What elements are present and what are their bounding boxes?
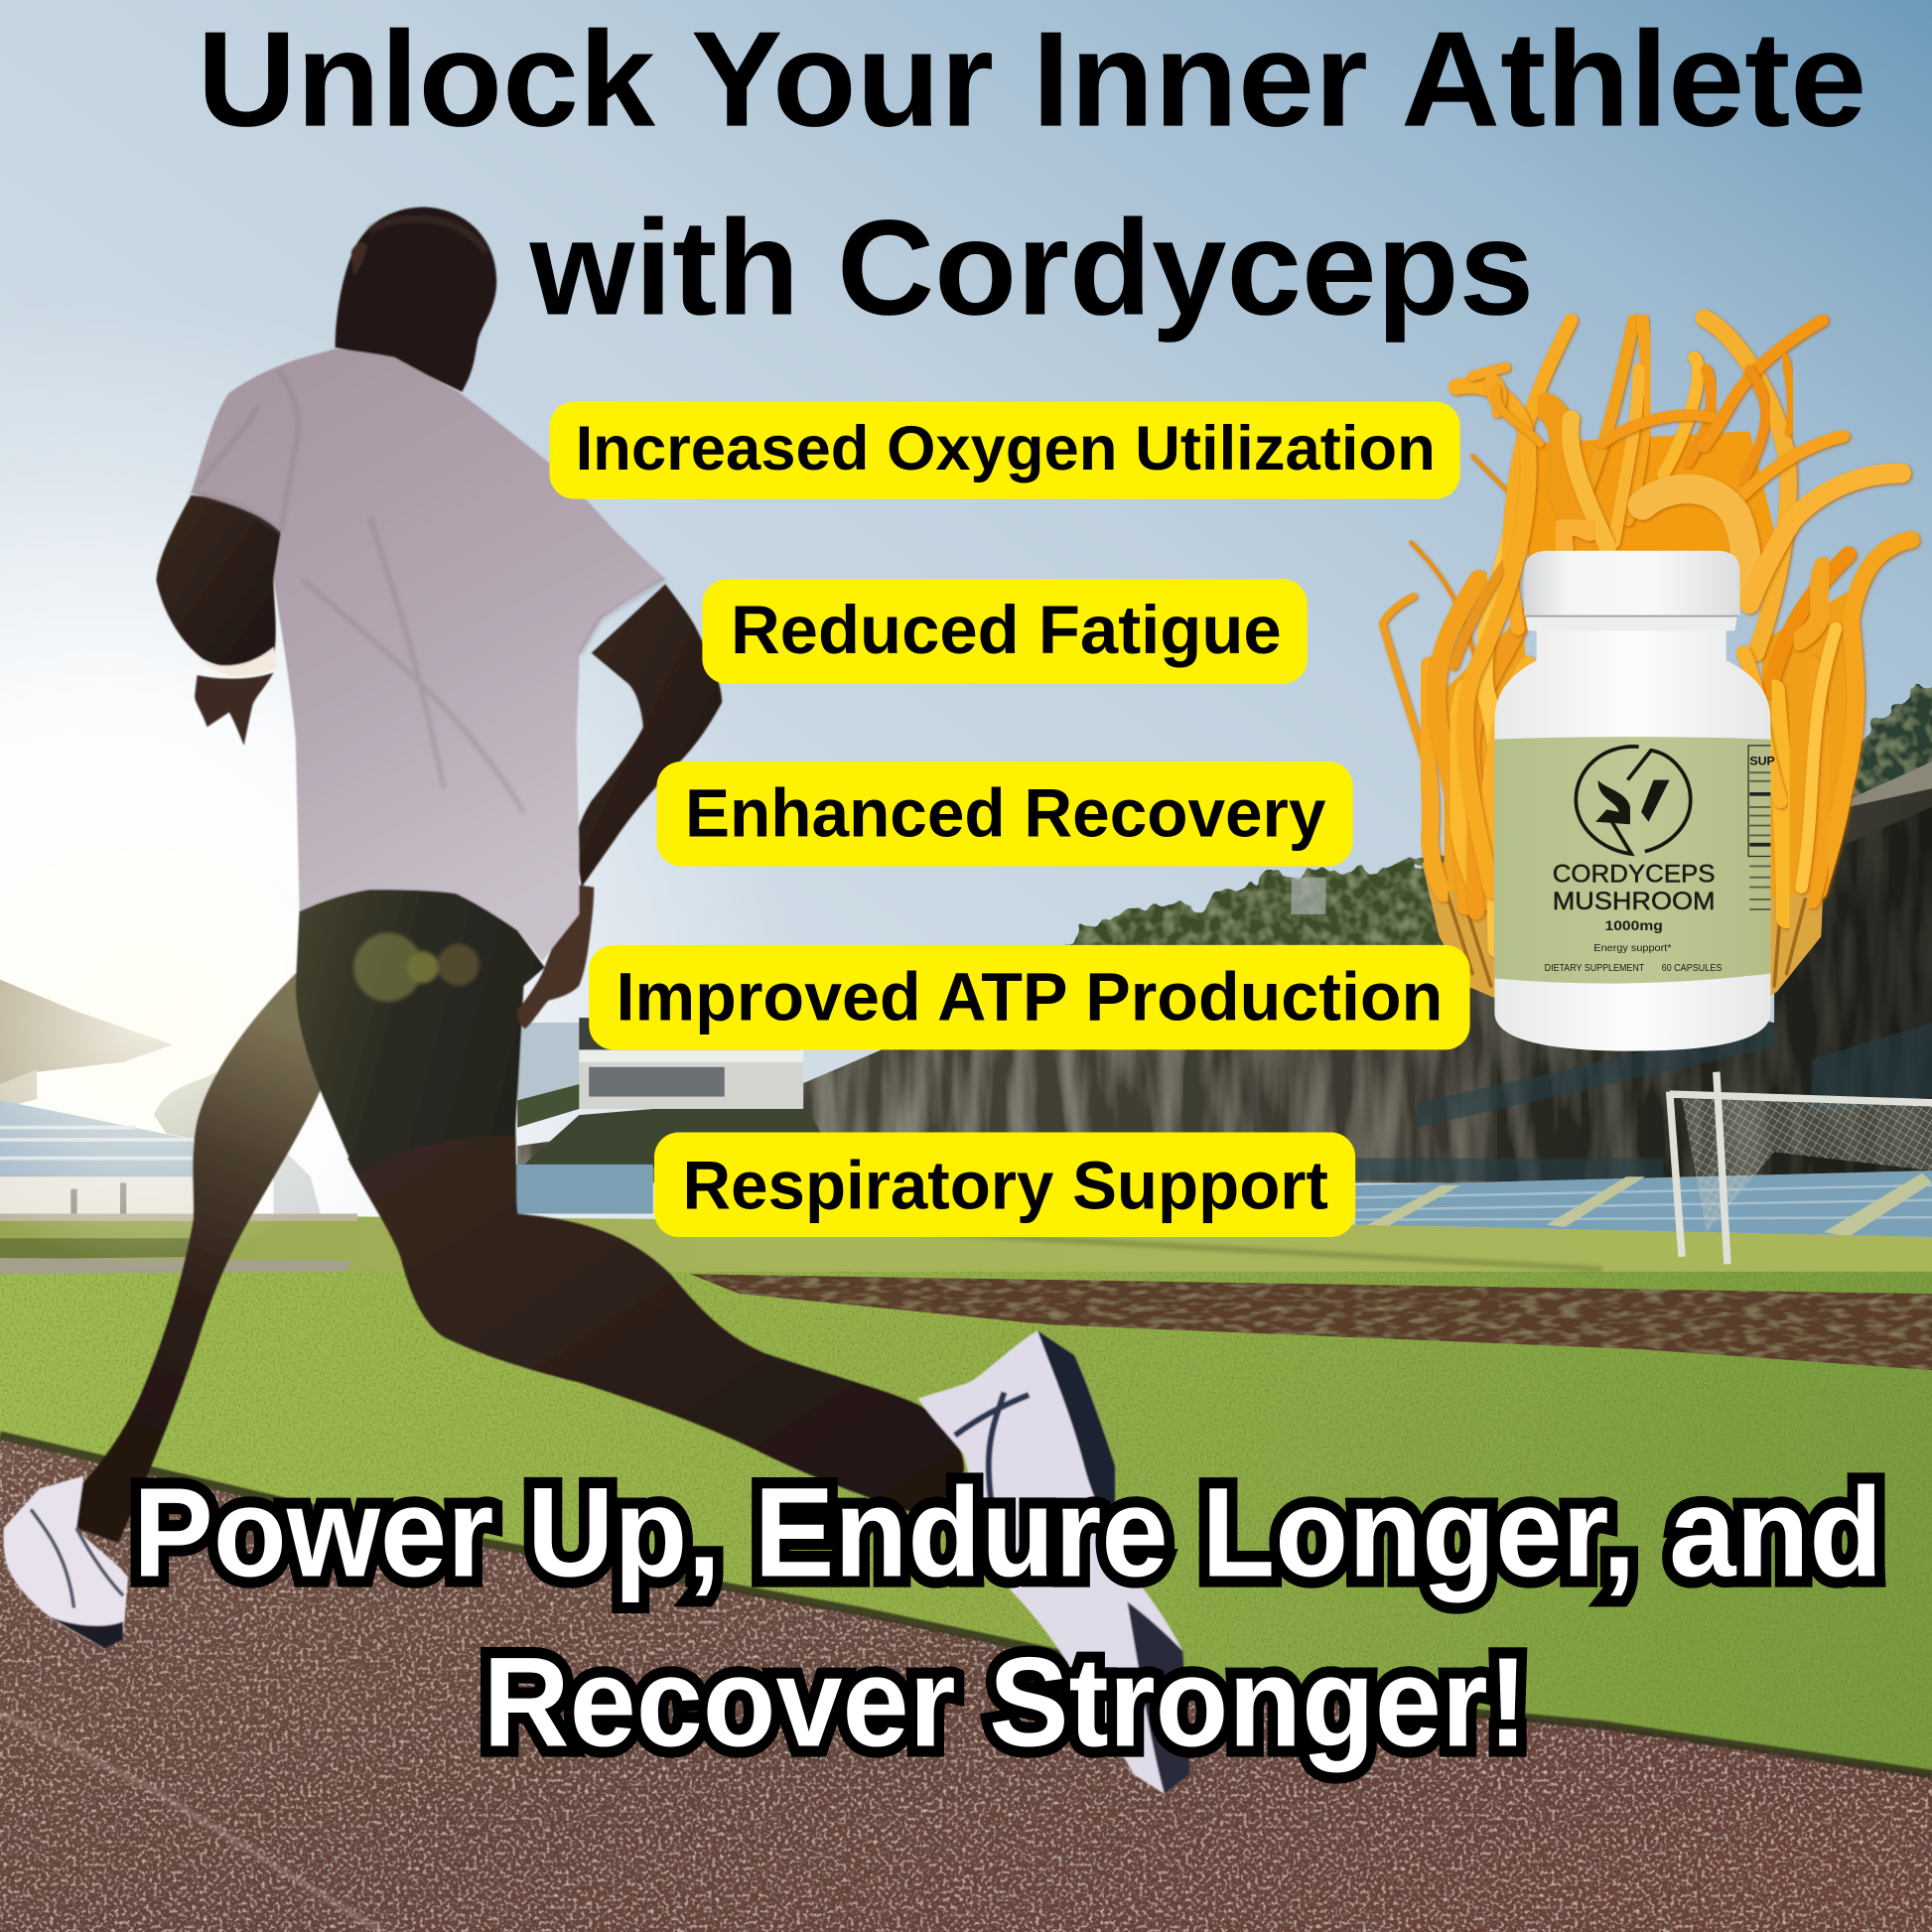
tagline: Recover Stronger!: [483, 1632, 1528, 1774]
benefit pill: Reduced Fatigue: [702, 579, 1308, 684]
supplement facts panel: SUP: [1749, 755, 1775, 768]
back leg: [76, 973, 323, 1543]
background: running track: [0, 1436, 1932, 1932]
product label: [1494, 737, 1775, 984]
benefit pill: Improved ATP Production: Improved ATP Production: [617, 960, 1443, 1035]
label text: CORDYCEPS: [1553, 862, 1716, 889]
title: Unlock Your Inner Athlete: [198, 3, 1866, 155]
neck and head: [336, 207, 496, 392]
bottle body: [1494, 628, 1770, 1051]
label text: [1545, 862, 1723, 974]
benefit pill: Respiratory Support: Respiratory Support: [683, 1148, 1328, 1223]
cordyceps mushroom cluster: [1382, 318, 1911, 1004]
label text: MUSHROOM: [1553, 889, 1716, 915]
sun glare: [0, 776, 407, 1269]
benefit pill: Reduced Fatigue: Reduced Fatigue: [731, 593, 1282, 668]
label text: DIETARY SUPPLEMENT: [1545, 963, 1644, 974]
building: [517, 1018, 803, 1128]
supplement facts panel: [1748, 746, 1775, 909]
bottle cap: [1524, 551, 1739, 630]
benefit pill: Improved ATP Production: [589, 945, 1470, 1049]
tagline: Power Up, Endure Longer, and: [133, 1461, 1882, 1603]
strands: [1382, 318, 1911, 949]
background: goal post: [1670, 1072, 1932, 1264]
shorts: [296, 890, 545, 1176]
cliff face: [517, 761, 1932, 1182]
white tower: [1292, 878, 1325, 914]
benefit pill: Enhanced Recovery: Enhanced Recovery: [685, 776, 1325, 852]
benefit pill: Enhanced Recovery: [656, 761, 1353, 866]
front shoe: [918, 1330, 1190, 1794]
left arm: [157, 495, 281, 746]
trees on hill: [1059, 678, 1932, 998]
background: sky: [0, 0, 1932, 1355]
benefit pill: Respiratory Support: [654, 1133, 1355, 1237]
background: infield grass: [0, 1213, 1932, 1849]
lens flare: [353, 932, 480, 1002]
benefit pill: Increased Oxygen Utilization: [550, 402, 1460, 499]
runner: [4, 207, 1190, 1794]
tagline: [133, 1461, 1882, 1774]
rear shoe: [4, 1476, 128, 1649]
label text: Energy support*: [1593, 943, 1672, 954]
front leg: [347, 1115, 964, 1518]
root clumps and dense base: [1422, 431, 1855, 1004]
fence: [1355, 1023, 1932, 1180]
supplement bottle: [1494, 551, 1775, 1051]
shirt: [191, 348, 665, 961]
logo: [1576, 747, 1691, 854]
right arm: [517, 584, 722, 1029]
title: [198, 3, 1866, 343]
label text: 60 CAPSULES: [1662, 963, 1723, 974]
background: dirt strip: [690, 1274, 1932, 1370]
benefit pill: Increased Oxygen Utilization: Increased Oxygen Utilization: [576, 414, 1436, 483]
stands: [0, 1100, 1932, 1237]
background: stadium scenery: [0, 678, 1932, 1237]
label text: 1000mg: [1604, 918, 1663, 933]
title: with Cordyceps: [529, 191, 1534, 343]
left stadium roof: [0, 980, 228, 1146]
